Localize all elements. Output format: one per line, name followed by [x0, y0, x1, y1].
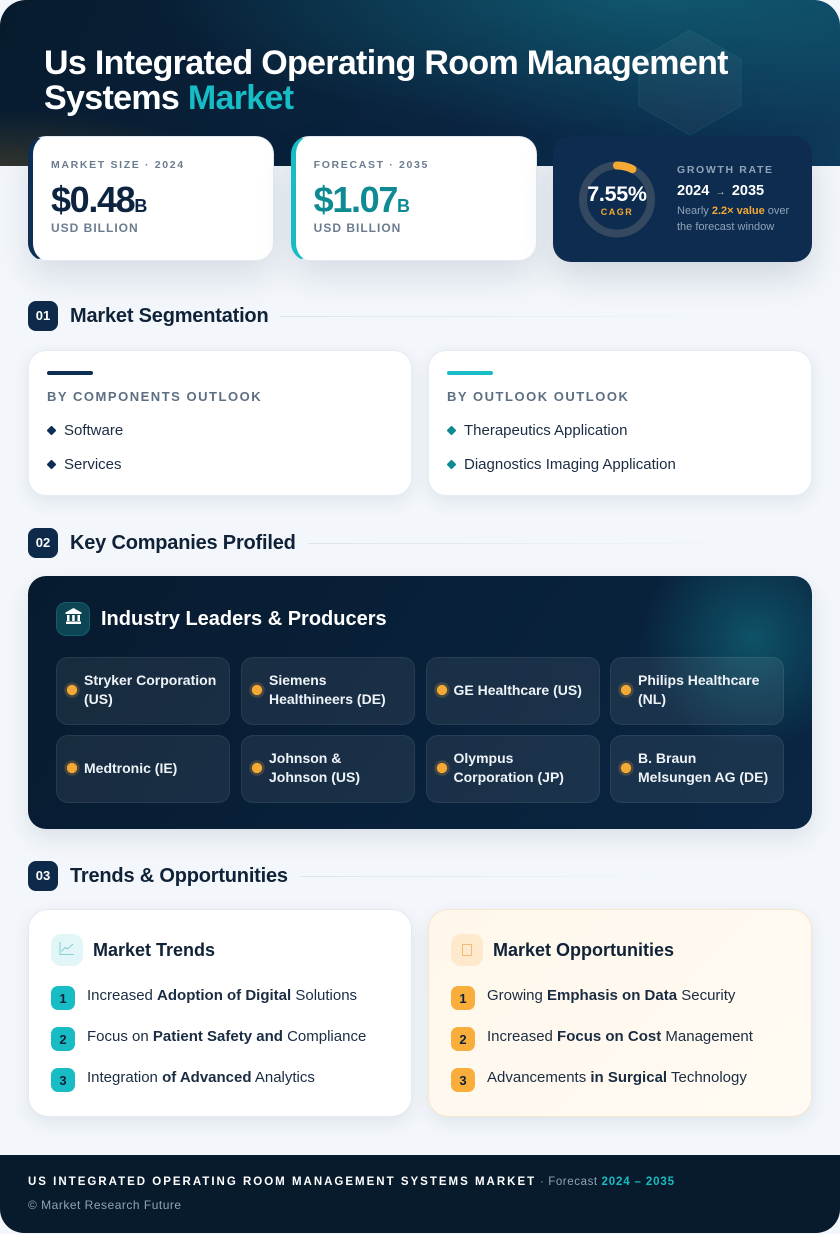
panel: market trends: Increased Adoption of Digital Solutions	[87, 987, 357, 1004]
section number 02	[28, 528, 58, 558]
company: Medtronic: Medtronic (IE)	[84, 760, 177, 776]
section heading: trends: Trends & Opportunities	[70, 865, 288, 887]
stat card: forecast: $1.07B	[314, 179, 410, 220]
section heading: segmentation: Market Segmentation	[70, 305, 268, 327]
trend 2: 2	[59, 1032, 67, 1047]
section number 03: 03	[36, 868, 50, 883]
company: B. Braun: B. Braun	[638, 750, 696, 766]
trend 3	[51, 1068, 75, 1092]
opportunity 3: 3	[459, 1073, 467, 1088]
CAGR ring	[579, 162, 655, 238]
stat card: forecast: FORECAST · 2035	[314, 159, 429, 171]
section heading: companies: Key Companies Profiled	[70, 532, 296, 554]
opportunity 1	[451, 986, 475, 1010]
company: Philips: (NL)	[638, 691, 666, 707]
company: Siemens: Healthineers (DE)	[269, 691, 386, 707]
company: Stryker: Stryker Corporation	[84, 672, 216, 688]
panel: market trends: Integration of Advanced Analytics	[87, 1069, 315, 1086]
panel: market opportunities: Growing Emphasis on Data Security	[487, 987, 735, 1004]
growth years: 2024 2035	[677, 183, 764, 199]
trend 2	[51, 1027, 75, 1051]
panel: components outlook: Software	[64, 422, 123, 439]
growth years: →	[716, 187, 726, 198]
footer	[0, 1155, 840, 1233]
stat card: growth rate	[553, 136, 812, 262]
growth note	[677, 205, 789, 233]
panel: outlook outlook: BY OUTLOOK OUTLOOK	[447, 389, 629, 404]
section number 01	[28, 301, 58, 331]
stat card: forecast	[291, 136, 537, 261]
company: J&J: Johnson &	[269, 750, 341, 766]
panel: outlook outlook: Therapeutics Application	[464, 422, 627, 439]
panel: components outlook: BY COMPONENTS OUTLOOK	[47, 389, 262, 404]
title: Us Integrated Operating Room Management Systems Market	[44, 44, 728, 117]
growth label: GROWTH RATE	[677, 164, 774, 176]
CAGR value: 7.55%	[587, 182, 647, 206]
growth note: Nearly 2.2× value over	[677, 205, 789, 217]
section number 03	[28, 861, 58, 891]
panel: components outlook: Services	[64, 456, 122, 473]
icon: target placeholder	[451, 934, 483, 966]
company: Stryker	[56, 657, 230, 725]
trend 1	[51, 986, 75, 1010]
opportunity 1: 1	[459, 991, 467, 1006]
company: Stryker: (US)	[84, 691, 113, 707]
growth note: the forecast window	[677, 221, 774, 233]
heading: Market Trends	[93, 940, 215, 960]
company: Siemens: Siemens	[269, 672, 327, 688]
company: B. Braun: Melsungen AG (DE)	[638, 769, 768, 785]
footer title: US INTEGRATED OPERATING ROOM MANAGEMENT SYSTEMS MARKET · Forecast 2024 – 2035	[28, 1176, 675, 1188]
panel: industry leaders	[28, 576, 812, 829]
company: Olympus: Corporation (JP)	[454, 769, 564, 785]
panel: components outlook	[28, 350, 412, 496]
company: GE	[426, 657, 600, 725]
panel: market opportunities: Advancements in Surgical Technology	[487, 1069, 747, 1086]
stat card: market size: $0.48B	[51, 179, 147, 220]
panel: market opportunities: Increased Focus on Cost Management	[487, 1028, 753, 1045]
opportunity 3	[451, 1068, 475, 1092]
opportunity 2: 2	[459, 1032, 467, 1047]
stat card: market size: MARKET SIZE · 2024	[51, 159, 185, 171]
stat card: market size	[28, 136, 274, 261]
decorative hexagon	[638, 30, 742, 136]
company: Olympus	[426, 735, 600, 803]
heading: Market Opportunities	[493, 940, 674, 960]
panel heading: Industry Leaders & Producers	[101, 608, 387, 630]
panel: market trends	[28, 909, 412, 1117]
panel: outlook outlook	[428, 350, 812, 496]
trend 1: 1	[59, 991, 67, 1006]
CAGR label: CAGR	[601, 207, 633, 217]
panel: market opportunities	[428, 909, 812, 1117]
panel: outlook outlook: Diagnostics Imaging Application	[464, 456, 676, 473]
opportunity 2	[451, 1027, 475, 1051]
header band	[0, 0, 840, 166]
section number 02: 02	[36, 535, 50, 550]
company: J&J: Johnson (US)	[269, 769, 360, 785]
section number 01: 01	[36, 308, 50, 323]
stat card: forecast: USD BILLION	[314, 221, 401, 235]
company: B. Braun	[610, 735, 784, 803]
panel: market trends: Focus on Patient Safety and Compliance	[87, 1028, 366, 1045]
trend 3: 3	[59, 1073, 67, 1088]
company: Philips: Philips Healthcare	[638, 672, 759, 688]
footer copyright: © Market Research Future	[28, 1198, 182, 1212]
company: Olympus: Olympus	[454, 750, 513, 766]
stat card: market size: USD BILLION	[51, 221, 139, 235]
icon: museum	[56, 602, 90, 636]
company: J&J	[241, 735, 415, 803]
company: Medtronic	[56, 735, 230, 803]
company: GE: GE Healthcare (US)	[454, 682, 582, 698]
company: Siemens	[241, 657, 415, 725]
company: Philips	[610, 657, 784, 725]
icon: chart	[51, 934, 83, 966]
